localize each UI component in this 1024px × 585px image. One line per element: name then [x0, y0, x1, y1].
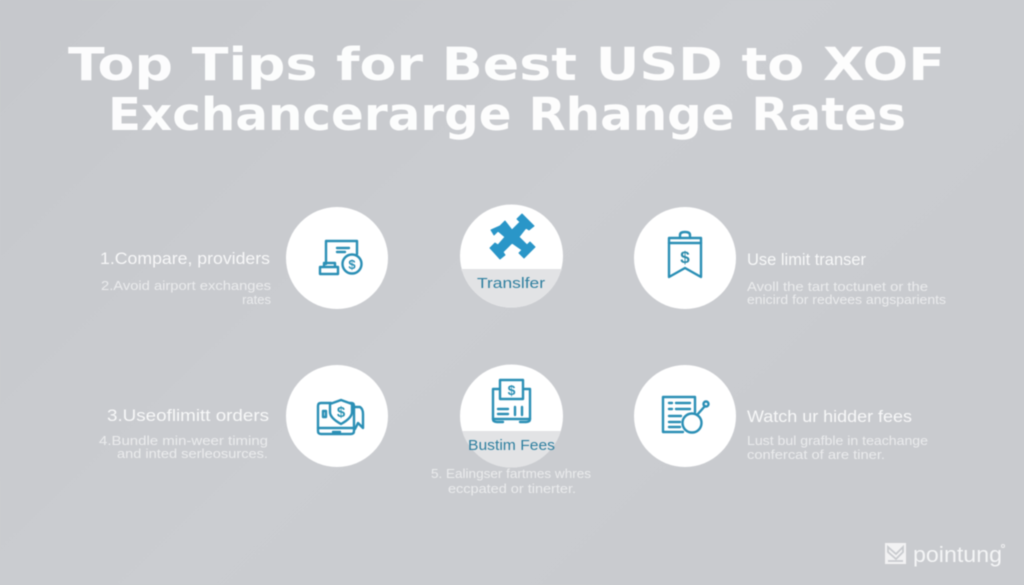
panel: compare providers icon circle: [286, 207, 388, 309]
icon: clipboard with dollar: $: [680, 248, 690, 267]
icon: card with shield and dollar: $: [337, 404, 346, 421]
icon: list with magnifier: [663, 397, 708, 432]
panel: fees circle: [460, 364, 563, 468]
title: Top Tips for Best USD to XOF: [68, 38, 945, 91]
tip: limit orders text: [99, 406, 269, 461]
tip: fees description: [431, 466, 592, 496]
panel: transfer circle: [460, 204, 563, 308]
label band: transfer: [461, 269, 562, 307]
label: transfer: Translfer: [477, 275, 545, 292]
tip: hidden fees text: confercat of are tiner.: [747, 447, 885, 462]
tip: hidden fees text: [747, 407, 928, 462]
panel: hidden fees icon circle: [634, 365, 736, 467]
tip: use limit transfer text: Use limit transer: [747, 250, 866, 269]
icon: logo mark: [885, 543, 906, 564]
tip: fees description: 5. Ealingser fartmes whres: [431, 466, 592, 481]
tip: compare providers text: 2.Avoid airport exchanges: [101, 278, 272, 293]
icon: receipt machine: $: [508, 382, 516, 398]
icon: crossed tools: [490, 214, 535, 259]
panel: limit transfer icon circle: [634, 207, 736, 309]
tip: limit orders text: 3.Useoflimitt orders: [107, 406, 269, 425]
tip: compare providers text: rates: [242, 292, 271, 307]
tip: compare providers text: [100, 249, 272, 307]
tip: compare providers text: 1.Compare, providers: [100, 249, 270, 268]
tip: use limit transfer text: [747, 250, 947, 307]
panel: limit orders icon circle: [286, 365, 388, 467]
icon: document with dollar coin: $: [348, 257, 356, 272]
label band: fees: [460, 431, 563, 468]
tip: limit orders text: 4.Bundle min-weer timing: [99, 433, 268, 448]
title: [68, 38, 945, 141]
label: fees: Bustim Fees: [468, 437, 555, 454]
title: Exchancerarge Rhange Rates: [108, 88, 906, 141]
tip: limit orders text: and inted serleosurces.: [117, 446, 268, 461]
tip: use limit transfer text: enicird for redvees angsparients: [747, 292, 947, 307]
tip: fees description: eccpated or tinerter.: [448, 481, 576, 496]
logo wordmark: pointung: [913, 542, 1002, 567]
logo: [885, 542, 1004, 567]
tip: hidden fees text: Watch ur hidder fees: [747, 407, 912, 426]
tip: use limit transfer text: Avoll the tart toctunet or the: [747, 279, 928, 294]
tip: hidden fees text: Lust bul grafble in teachange: [747, 433, 928, 448]
